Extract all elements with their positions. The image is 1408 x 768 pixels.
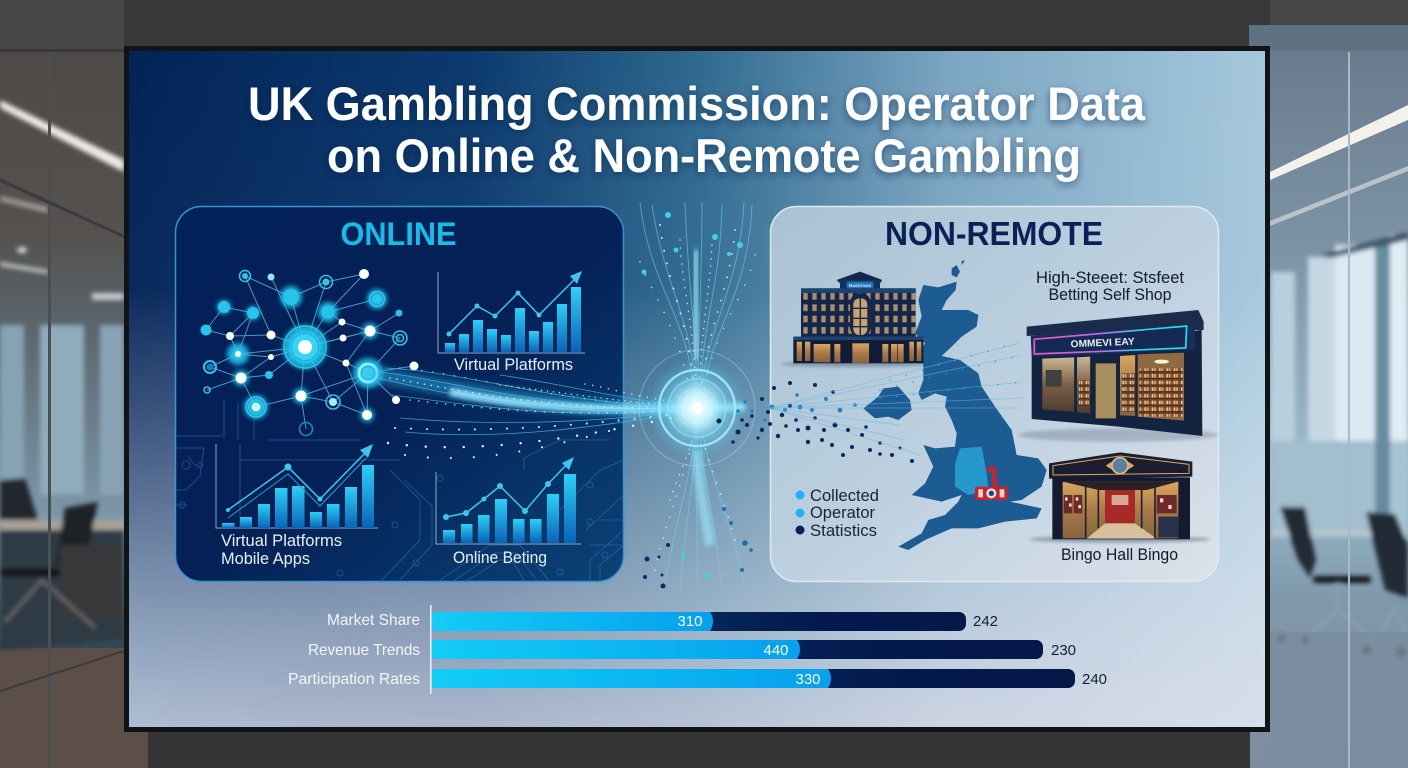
legend: Collected — [810, 486, 879, 505]
label: bingo hall: Bingo Hall Bingo — [1061, 545, 1178, 564]
chart: online betting — [436, 457, 581, 567]
central rings — [639, 350, 755, 466]
label: Online Beting — [453, 548, 547, 567]
label: Mobile Apps — [221, 549, 310, 568]
panel: non-remote — [770, 206, 1218, 582]
bar: participation rates — [288, 669, 1107, 688]
heading: online: ONLINE — [340, 216, 456, 252]
office background: right room — [1249, 25, 1408, 768]
map marker — [975, 467, 1008, 500]
vertical funnel lines — [640, 202, 752, 592]
label — [221, 531, 342, 568]
legend: Operator — [810, 503, 875, 522]
legend — [796, 486, 879, 540]
building: casino: Nasinnos — [849, 283, 871, 289]
building: casino — [782, 272, 932, 367]
highlighted region — [955, 447, 988, 495]
bar: revenue trends — [308, 640, 1076, 659]
network diagram — [200, 269, 418, 436]
title: on Online & Non-Remote Gambling — [327, 129, 1081, 182]
data stream and central burst — [368, 202, 1024, 592]
funnel particles — [640, 225, 755, 570]
label: high-street betting shop — [1036, 268, 1184, 304]
label: high-street betting shop: Betting Self Shop — [1048, 285, 1172, 304]
bar: market share — [327, 612, 998, 631]
map of the UK — [863, 261, 1047, 550]
fan lines to non-remote — [770, 343, 1024, 455]
chart: virtual platforms mobile apps — [216, 444, 378, 568]
bar: participation rates: 330 — [795, 671, 821, 688]
blue particles — [736, 393, 857, 422]
building: bingo hall — [1030, 452, 1210, 543]
bar: revenue trends: 230 — [1051, 642, 1076, 659]
navy particles — [716, 381, 914, 463]
display screen — [129, 51, 1265, 727]
bar: revenue trends: 440 — [763, 642, 789, 659]
label: Virtual Platforms — [221, 531, 342, 550]
stream particles — [388, 368, 690, 458]
bar: market share: Market Share — [327, 612, 420, 629]
glowing stream — [368, 374, 697, 408]
label: high-street betting shop: High-Steeet: Stsfeet — [1036, 268, 1184, 287]
panel: online — [176, 206, 624, 582]
chart: virtual platforms top — [438, 271, 585, 374]
bar: participation rates: Participation Rates — [288, 671, 420, 688]
chart: horizontal bars — [288, 605, 1107, 694]
bar: market share: 242 — [973, 613, 998, 630]
legend: Statistics — [810, 521, 877, 540]
label: Virtual Platforms — [454, 355, 573, 374]
circuit board pattern — [176, 400, 624, 582]
title: UK Gambling Commission: Operator Data — [248, 77, 1146, 130]
heading: non-remote: NON-REMOTE — [885, 215, 1103, 252]
bar: participation rates: 240 — [1082, 671, 1107, 688]
bar: market share: 310 — [677, 613, 703, 630]
display screen frame — [124, 46, 1270, 732]
building: betting shop — [1018, 310, 1218, 442]
bar: revenue trends: Revenue Trends — [308, 642, 420, 659]
building: betting shop: OMMEVI EAY — [1070, 337, 1135, 350]
stream lines — [378, 368, 690, 435]
title — [248, 77, 1146, 182]
